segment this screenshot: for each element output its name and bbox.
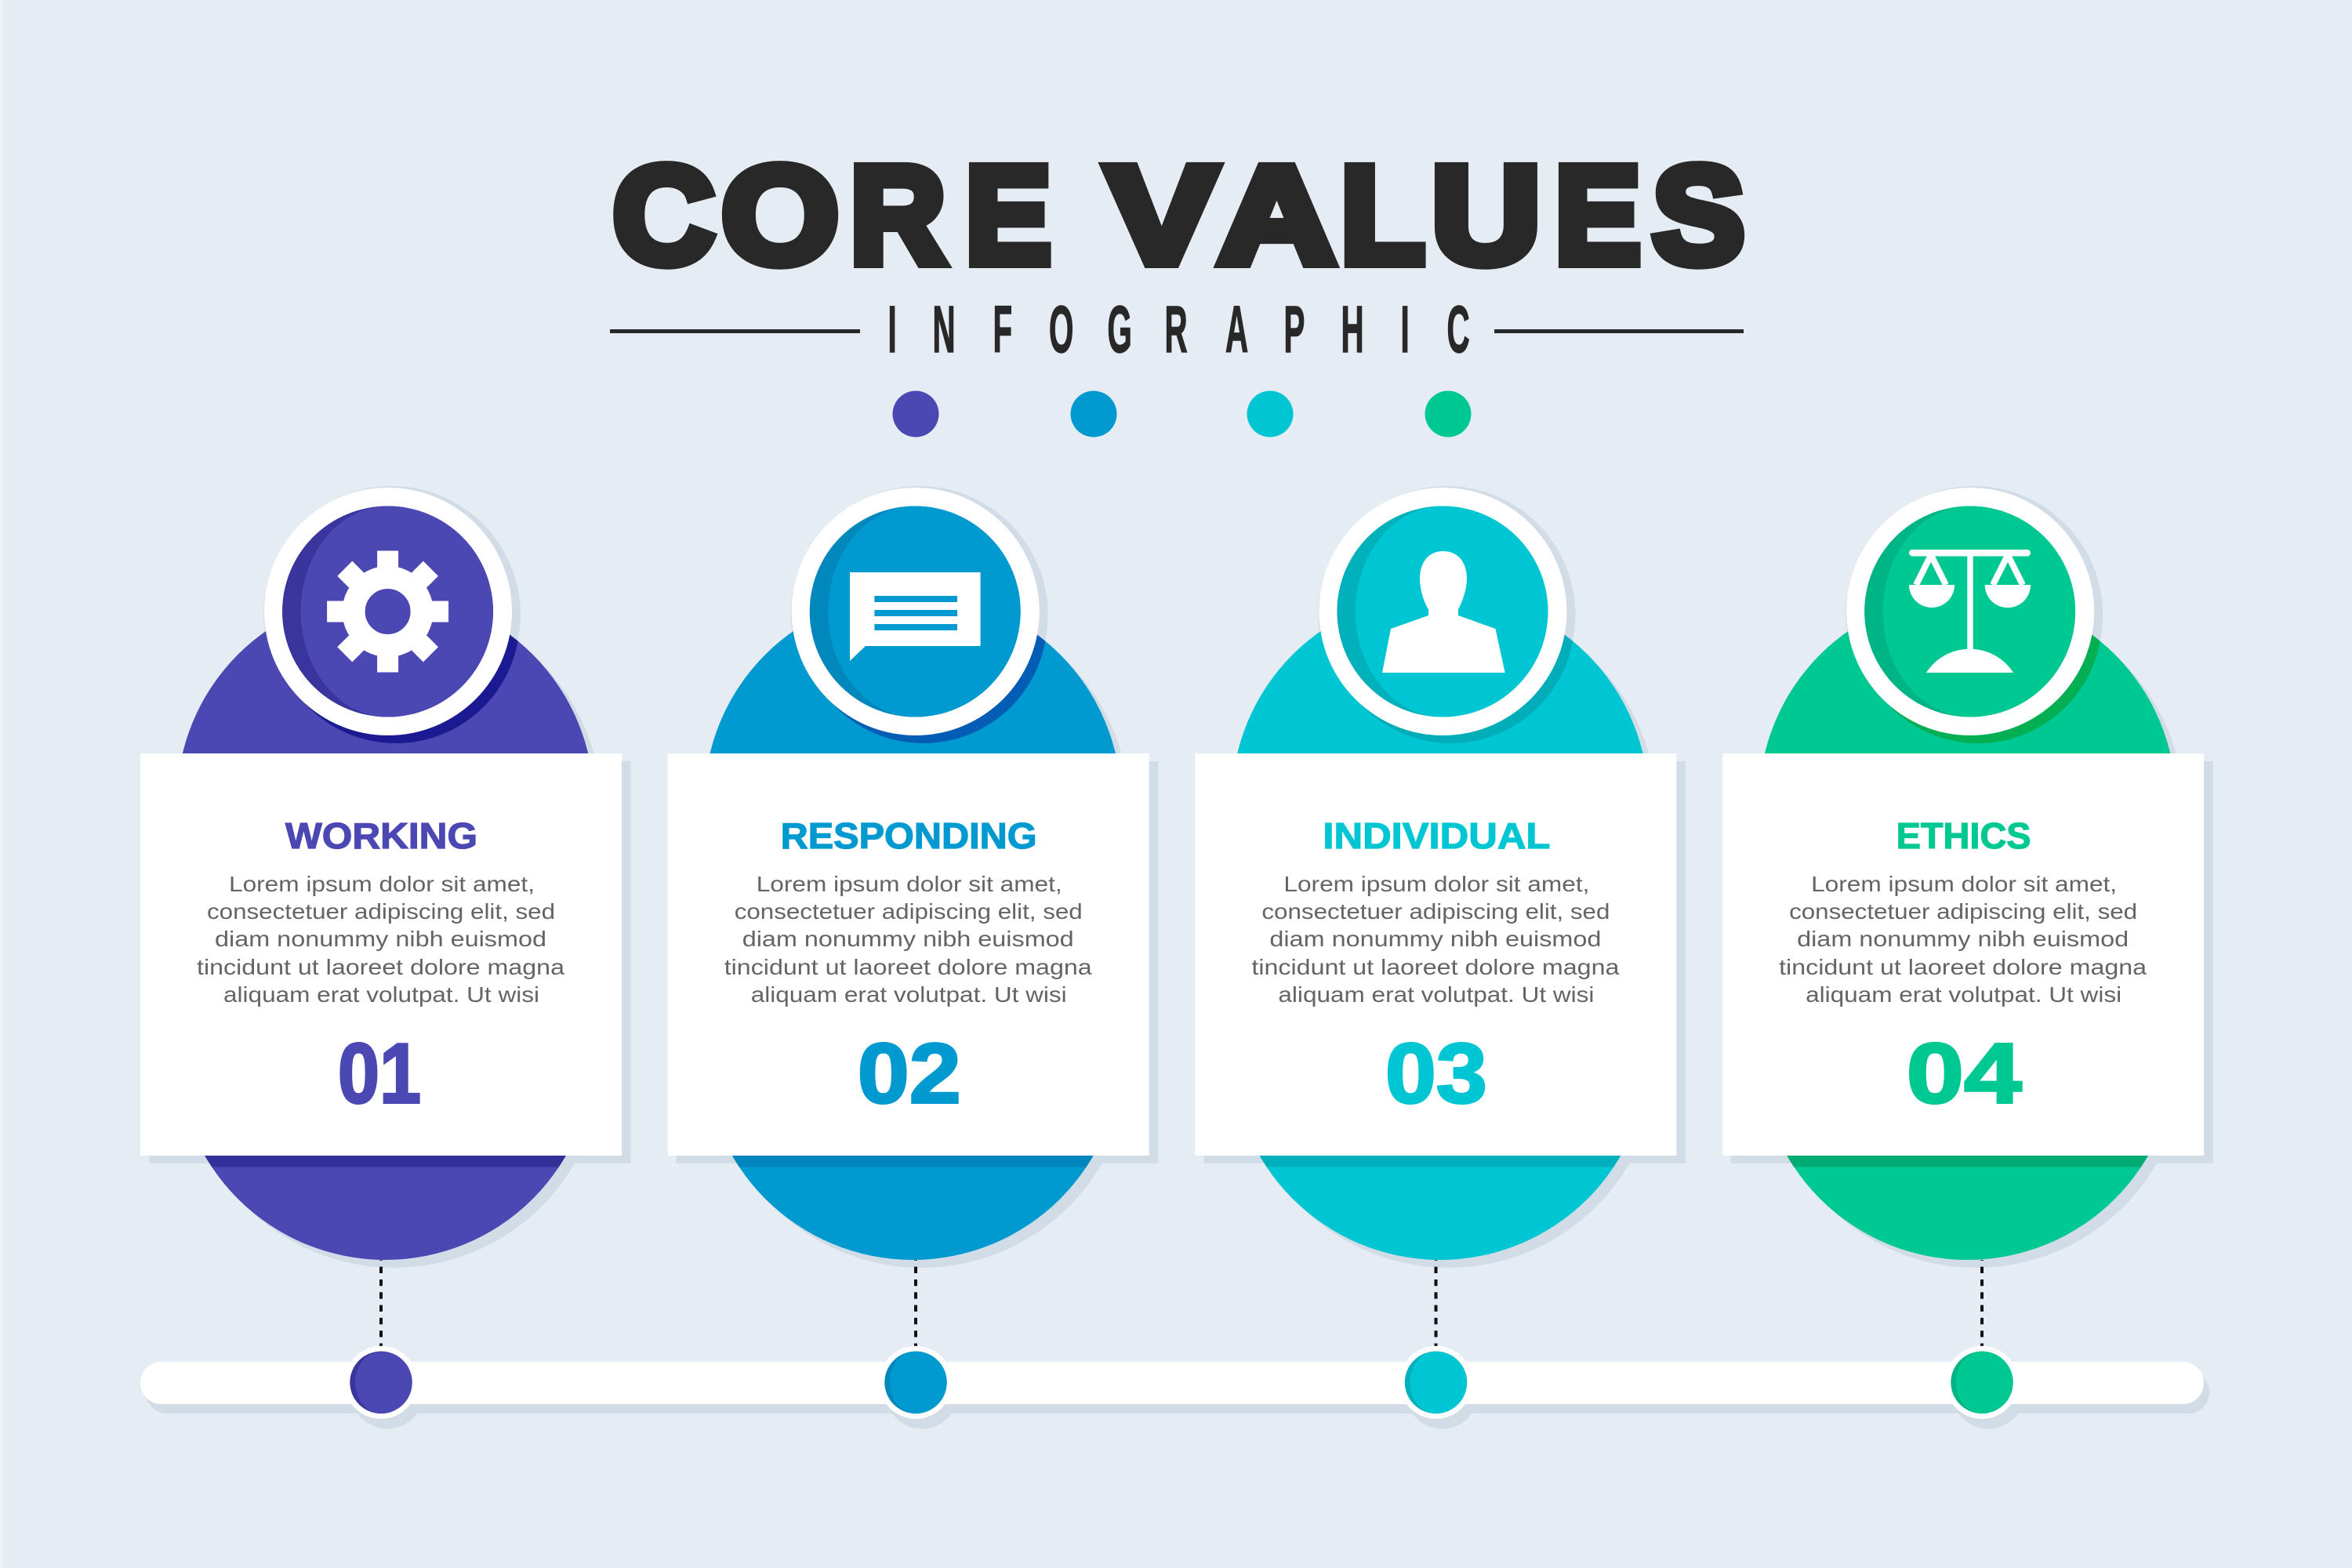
body text: Lorem ipsum dolor sit amet,	[757, 872, 1062, 896]
timeline connectors	[381, 1260, 1982, 1347]
title: V	[1106, 139, 1217, 292]
title: O	[722, 139, 839, 292]
body text: aliquam erat volutpat. Ut wisi	[751, 982, 1067, 1007]
bottom semicircle	[177, 843, 594, 1260]
timeline bar	[140, 1356, 2209, 1428]
panel: working	[140, 486, 630, 1268]
body text: consectetuer adipiscing elit, sed	[1789, 899, 2137, 924]
body text: diam nonummy nibh euismod	[1269, 927, 1601, 951]
ring cast shadow	[1361, 635, 1573, 743]
body text	[1779, 872, 2147, 1007]
heading: RESPONDING	[781, 815, 1037, 856]
ring cast shadow	[1886, 635, 2100, 743]
icon badge	[1846, 488, 2094, 735]
card band	[205, 1156, 566, 1167]
timeline node 02	[880, 1346, 952, 1419]
body text: Lorem ipsum dolor sit amet,	[1811, 872, 2117, 896]
bottom semicircle	[1232, 843, 1649, 1260]
body text: aliquam erat volutpat. Ut wisi	[1806, 982, 2122, 1007]
card	[1195, 753, 1676, 1156]
body text: Lorem ipsum dolor sit amet,	[1283, 872, 1589, 896]
icon: chat bubble	[850, 572, 981, 661]
shadows	[149, 486, 630, 1268]
icon badge	[1319, 488, 1566, 735]
heading: INDIVIDUAL	[1323, 815, 1550, 856]
bottom semicircle	[1759, 843, 2176, 1260]
title	[613, 139, 1744, 292]
icon: scales	[1909, 550, 2031, 673]
card	[668, 753, 1149, 1156]
title: L	[1341, 139, 1425, 292]
timeline node 03	[1399, 1346, 1472, 1419]
title: A	[1218, 139, 1335, 292]
icon badge	[264, 488, 512, 735]
shadows	[677, 486, 1158, 1268]
body text: consectetuer adipiscing elit, sed	[207, 899, 555, 924]
body text	[724, 872, 1093, 1007]
number: 03	[1385, 1025, 1487, 1121]
body text	[1251, 872, 1620, 1007]
title: U	[1432, 139, 1541, 292]
body text: diam nonummy nibh euismod	[215, 927, 546, 951]
body text: aliquam erat volutpat. Ut wisi	[1278, 982, 1594, 1007]
heading: WORKING	[285, 815, 477, 856]
top semicircle	[704, 593, 1121, 1011]
number: 04	[1907, 1025, 2022, 1121]
icon: person	[1382, 551, 1505, 673]
shadows	[1203, 486, 1686, 1268]
card band	[1259, 1156, 1621, 1167]
number: 02	[858, 1025, 961, 1121]
body text: consectetuer adipiscing elit, sed	[735, 899, 1083, 924]
card	[1722, 753, 2204, 1156]
body text: aliquam erat volutpat. Ut wisi	[223, 982, 539, 1007]
timeline node 04	[1946, 1346, 2018, 1419]
panel: individual	[1195, 486, 1686, 1268]
title: C	[613, 139, 714, 292]
body text: tincidunt ut laoreet dolore magna	[197, 955, 565, 979]
body text: tincidunt ut laoreet dolore magna	[1251, 955, 1620, 979]
body text	[197, 872, 565, 1007]
top semicircle	[1759, 593, 2176, 1011]
title: E	[966, 139, 1051, 292]
title: R	[850, 139, 946, 292]
shadows	[1731, 486, 2213, 1268]
card	[140, 753, 622, 1156]
subtitle: infographic with rules: INFOGRAPHIC	[888, 292, 1470, 366]
body text: diam nonummy nibh euismod	[742, 927, 1074, 951]
icon: gear	[327, 550, 448, 673]
top semicircle	[177, 593, 594, 1011]
card band	[1787, 1156, 2148, 1167]
number: 01	[338, 1025, 421, 1121]
heading: ETHICS	[1896, 815, 2031, 856]
body text: diam nonummy nibh euismod	[1797, 927, 2129, 951]
card band	[732, 1156, 1093, 1167]
body text: Lorem ipsum dolor sit amet,	[229, 872, 535, 896]
timeline node 01	[345, 1346, 417, 1419]
top semicircle	[1232, 593, 1649, 1011]
ring cast shadow	[831, 635, 1046, 743]
panel: ethics	[1722, 486, 2213, 1268]
bottom semicircle	[704, 843, 1121, 1260]
subtitle: infographic with rules	[610, 292, 1744, 366]
icon badge	[792, 488, 1040, 735]
body text: tincidunt ut laoreet dolore magna	[1779, 955, 2147, 979]
body text: tincidunt ut laoreet dolore magna	[724, 955, 1093, 979]
title: S	[1653, 139, 1744, 292]
title: E	[1555, 139, 1640, 292]
ring cast shadow	[305, 635, 517, 743]
body text: consectetuer adipiscing elit, sed	[1261, 899, 1610, 924]
colour dots	[892, 390, 1471, 437]
panel: responding	[668, 486, 1158, 1268]
